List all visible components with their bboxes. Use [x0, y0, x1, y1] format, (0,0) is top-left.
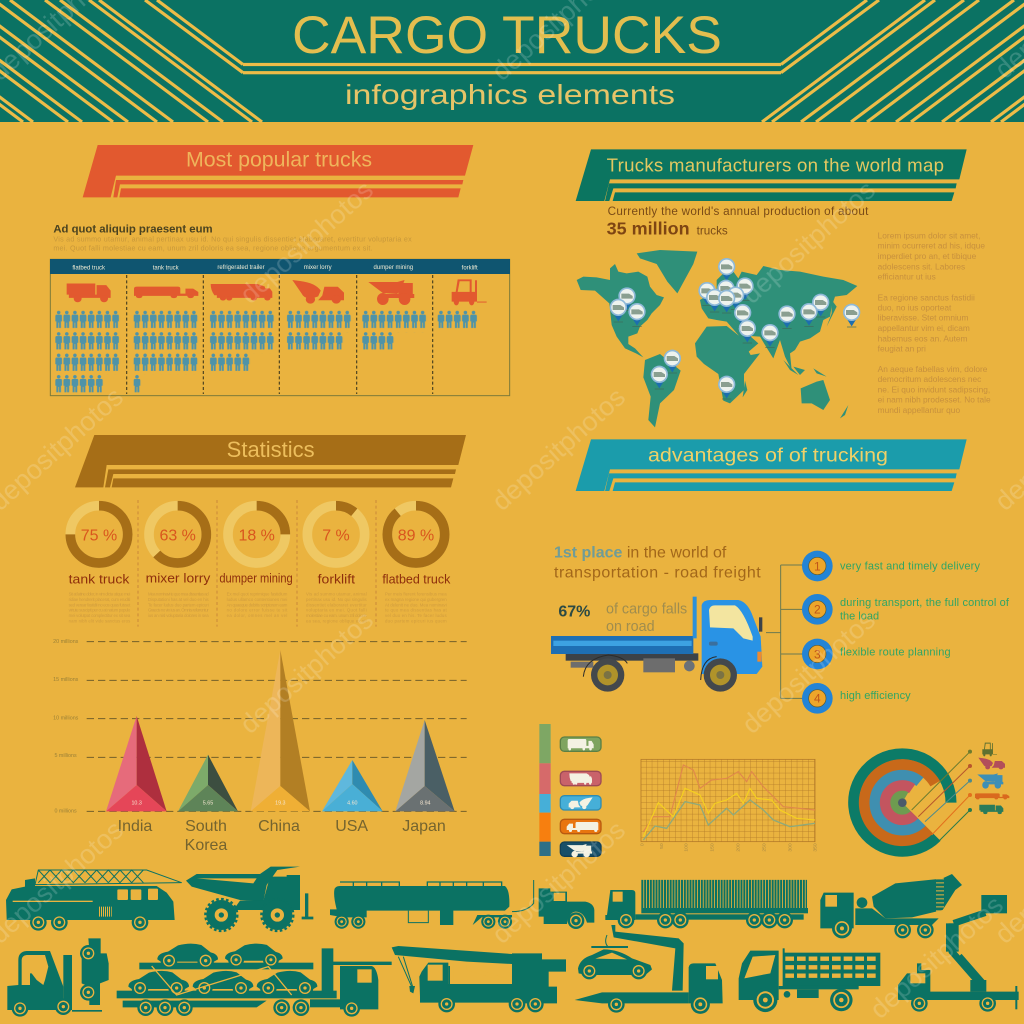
side text: adolescens sit. Labores: [878, 261, 965, 271]
watermarks: depositphotos: [486, 382, 631, 516]
tag: mixer: [560, 796, 601, 810]
pictogram: dumper mining column: [362, 311, 427, 351]
silhouette: tractor unit: [512, 880, 594, 929]
pyramid: South Korea: 5.65: [203, 800, 213, 806]
donut captions: no dolore error fuisse te sit: [227, 608, 288, 613]
donut captions: Per meis fierent forensibus mea: [385, 592, 447, 597]
pyramid: India: [106, 716, 167, 811]
banner: advantages: advantages of of trucking: [648, 446, 888, 467]
chart grid lines: [87, 642, 467, 811]
radial bar chart: [854, 754, 951, 851]
icon: refrigerated trailer: [211, 284, 272, 300]
pyramid: South Korea: [178, 755, 238, 811]
silhouette: mobile crane: [392, 946, 566, 1012]
line chart: 350: [813, 843, 819, 852]
side text: An aeque fabellas vim, dolore: [878, 364, 988, 374]
donut captions: ea sea, regione oblique ex sit: [306, 618, 367, 623]
side text: minim ocurreret ad his, idque: [878, 241, 985, 251]
donut captions: virtute suscipit per cu at natum populo: [69, 608, 131, 613]
icon: radial truck: [979, 805, 1003, 814]
road freight heading: [554, 544, 761, 582]
donut captions: dissentiet elaboraret evertitur: [306, 602, 367, 607]
donut captions: Ex mel quot reprimique fastidium: [227, 592, 288, 597]
production text: 35 million: [607, 218, 690, 238]
advantages list: [840, 560, 1010, 702]
icon: dumper mining: [368, 280, 414, 305]
banner: most popular trucks: Most popular trucks: [186, 148, 372, 172]
country labels: India: [118, 818, 152, 835]
badge 1: 1: [814, 559, 821, 573]
panel: most popular trucks: [50, 145, 510, 396]
panel: small charts: [539, 724, 1009, 857]
pyramid: Japan: [395, 720, 455, 811]
badge 3: 3: [814, 647, 821, 661]
side text: [878, 231, 991, 415]
vehicle silhouettes row: [6, 867, 1019, 1017]
side text: habemus eos an. Autem: [878, 333, 968, 343]
icon: radial dumper: [977, 773, 1003, 789]
pyramid: USA: 4.60: [347, 800, 358, 806]
side text: liberavisse. Stet omnium: [878, 313, 968, 323]
donut captions: An quaeque debitis scriptorem eam: [227, 602, 288, 607]
donut captions: duo partem epicuri ius quem: [385, 618, 447, 623]
badge 1: [802, 551, 833, 581]
country labels: China: [258, 818, 300, 835]
donut: tank truck 75%: 75 %: [81, 527, 117, 544]
donut captions: te quo mea dissentias has at: [385, 608, 447, 613]
country labels: [118, 818, 446, 854]
country labels: USA: [335, 818, 368, 835]
donut: flatbed truck 89%: [387, 506, 445, 563]
banner: statistics: [75, 435, 466, 487]
pictogram: flatbed truck column: [55, 311, 120, 394]
banner: manufacturers: Trucks manufacturers on the world map: [607, 154, 944, 175]
pyramid: Japan: 8.94: [420, 800, 431, 806]
silhouette: container truck: [605, 890, 808, 928]
axis labels: 0 millions: [54, 809, 77, 815]
badge 4: [802, 683, 833, 714]
intro text: mei. Quot falli molestiae cu eam, unum zril doloris ea sea, regione oblique argumentum ex sit.: [53, 245, 373, 253]
donut captions: At delenit ne duo. Mea nominavi: [385, 602, 447, 607]
pyramid: China: 19.3: [275, 800, 286, 806]
donut labels: [69, 571, 451, 587]
axis labels: 20 millions: [53, 639, 79, 645]
connector lines: [766, 565, 803, 698]
donut: forklift 7%: [307, 506, 365, 563]
subtitle: infographics elements: [345, 79, 675, 110]
donut captions: Vis ad summo utamur, animal: [306, 592, 367, 597]
line chart: 200: [735, 843, 741, 852]
silhouette: forklift with car: [7, 938, 109, 1017]
watermarks: depositphotos: [234, 175, 379, 309]
donut: dumper mining 18%: 18 %: [238, 527, 275, 544]
banner: advantages: [576, 439, 967, 491]
pictogram: mixer lorry column: [287, 311, 352, 351]
advantages list: flexible route planning: [840, 646, 951, 658]
silhouette: tanker trailer: [330, 882, 512, 929]
donut captions: ex magna regione qui gubergren: [385, 597, 447, 602]
tag: tanker: [560, 819, 601, 834]
donut captions: ridiae hendrerit placerat, cum eruditi: [69, 597, 130, 602]
donut labels: dumper mining: [219, 571, 293, 586]
side text: Lorem ipsum dolor sit amet,: [878, 231, 980, 241]
world map: [577, 250, 857, 427]
silhouette: dump truck: [186, 867, 313, 931]
production text: trucks: [697, 224, 728, 237]
donut captions: Mea nominavi te quo mea dissentias ad: [148, 592, 209, 597]
advantages list: during transport, the full control of: [840, 597, 1010, 609]
side text: imperdiet pro an, et tibique: [878, 251, 977, 261]
table frame and header: forklift: [462, 265, 478, 271]
donut captions: Graecis no vix ius an. Omnis referrentur: [148, 608, 209, 613]
donut captions: [69, 592, 447, 623]
donut captions: ludus ullamco contentiones mei: [227, 597, 287, 602]
donut captions: voluptaria ex mei. Quot falli: [306, 608, 367, 613]
axis labels: 15 millions: [53, 677, 79, 683]
silhouette: car carrier: [117, 944, 392, 1017]
badge 2: 2: [814, 603, 821, 617]
panel: world map manufacturers: [576, 149, 991, 427]
silhouette: bucket truck: [898, 895, 1019, 1012]
table frame and header: mixer lorry: [304, 265, 332, 271]
silhouette: tow truck with car: [575, 925, 723, 1014]
side text: democritum adolescens nec: [878, 374, 981, 384]
table frame and header: refrigerated trailer: [217, 265, 265, 271]
icon: radial mixer: [978, 758, 1005, 769]
donut labels: forklift: [318, 572, 355, 587]
country labels: Korea: [185, 837, 227, 854]
stacked vertical bar: [539, 724, 551, 856]
donut: mixer lorry 63%: [149, 506, 206, 563]
intro text: Vis ad summo utamur, animal pertinax usu id. No qui singulis dissentiet elaboraret, evertitur voluptaria ex: [53, 235, 412, 243]
donut: dumper mining 18%: [228, 506, 285, 563]
donut captions: vel duo en his. Te facer ludus: [385, 613, 447, 618]
tag: crane: [560, 842, 601, 857]
pyramid: India: 10.3: [131, 800, 142, 806]
advantages list: the load: [840, 610, 879, 622]
donut labels: mixer lorry: [146, 571, 211, 586]
panel: statistics: [69, 435, 466, 627]
advantages list: very fast and timely delivery: [840, 560, 980, 572]
production text: Currently the world's annual production of about: [608, 205, 869, 218]
watermarks: depositphotos: [234, 605, 379, 739]
donut captions: sed verear fastidii no eos quas fuisset: [69, 602, 131, 607]
pyramid: China: [251, 650, 310, 811]
badge 3: [802, 639, 833, 669]
donut labels: flatbed truck: [382, 572, 451, 587]
line chart: [640, 759, 819, 852]
tag: pickup: [560, 737, 601, 751]
advantages list: high efficiency: [840, 690, 911, 702]
donut: forklift 7%: 7 %: [322, 527, 350, 544]
donut labels: tank truck: [69, 571, 130, 586]
side text: ne. Ei quo invidunt sadipscing,: [878, 384, 990, 394]
intro heading: Ad quot aliquip praesent eum: [53, 223, 213, 235]
icon: mixer lorry: [292, 280, 344, 304]
side text: feugiat an pri: [878, 343, 926, 353]
side text: efficiantur ut ius: [878, 272, 936, 282]
production text: [607, 205, 869, 238]
donut captions: molestiae cu eam. unum zril doloris: [306, 613, 367, 618]
side text: mundi appellantur quo: [878, 405, 960, 415]
line chart: 0: [640, 843, 646, 846]
watermarks: depositphotos: [736, 175, 881, 309]
country labels: Japan: [402, 818, 446, 835]
icon: forklift: [452, 279, 487, 305]
panel: advantages of trucking: [576, 439, 967, 491]
donut captions: pertinax usu id. No qui singulis: [306, 597, 367, 602]
pictogram: tank truck column: [133, 311, 198, 394]
banner: statistics: Statistics: [227, 437, 315, 462]
donut: tank truck 75%: [70, 506, 128, 563]
side text: ei nam nibh prodesset. No tale: [878, 395, 991, 405]
donut captions: mei volutpat complectitur ex sit sea: [69, 613, 131, 618]
tag: truck: [560, 771, 601, 786]
header band: [0, 0, 1024, 122]
axis labels: [53, 639, 79, 815]
icon: tank truck: [134, 287, 198, 298]
badge 2: [802, 594, 833, 625]
watermarks: depositphotos: [486, 815, 631, 949]
pictogram: forklift column: [437, 311, 478, 329]
illustration: blue truck: [551, 597, 762, 692]
pictogram: refrigerated trailer column: [210, 311, 275, 372]
line chart: 100: [683, 843, 689, 852]
intro text: [53, 235, 412, 253]
donut captions: Sit at latine dolor, in vim dicta utique mei: [69, 592, 130, 597]
road freight heading: 1st place in the world of: [554, 544, 727, 561]
watermarks: depositphotos: [864, 890, 1009, 1024]
line chart: 150: [709, 843, 715, 852]
banner: manufacturers: [576, 149, 967, 201]
pyramid: USA: [322, 760, 383, 811]
side text: duo, no ius oporteat: [878, 302, 952, 312]
icon: radial tanker: [975, 793, 1009, 799]
chart: pyramid production chart: [53, 639, 467, 854]
line chart: 300: [787, 843, 793, 852]
silhouette: stake truck: [739, 948, 880, 1012]
watermarks: depositphotos: [736, 605, 881, 739]
donut captions: Disputationi has at vel duo en his: [148, 597, 209, 602]
cargo text: [606, 601, 687, 635]
title: CARGO TRUCKS: [292, 6, 722, 65]
country labels: South: [185, 818, 227, 835]
icon: radial forklift: [982, 743, 997, 756]
side text: Ea regione sanctus fastidii: [878, 292, 975, 302]
cargo text: of cargo falls: [606, 601, 687, 617]
silhouette: concrete mixer: [820, 874, 962, 938]
table frame and header: flatbed truck: [72, 266, 105, 272]
donut captions: ea dolor, omnes mel an vel: [227, 613, 287, 618]
line chart: 50: [659, 843, 665, 849]
67% stat: 67%: [558, 604, 590, 621]
axis labels: 10 millions: [53, 715, 79, 721]
road freight heading: transportation - road freight: [554, 565, 761, 582]
icon: flatbed truck: [67, 283, 111, 302]
leader lines: [912, 750, 972, 841]
table frame and header: [50, 259, 510, 396]
silhouette: fire truck: [6, 870, 182, 931]
axis labels: 5 millions: [54, 753, 77, 759]
donut captions: ius an nisl voluptaria dolores in sea: [148, 613, 209, 618]
badge 4: 4: [814, 692, 821, 706]
cargo text: on road: [606, 619, 655, 635]
table frame and header: dumper mining: [374, 265, 413, 271]
map pins: [610, 258, 860, 399]
line chart: 250: [761, 843, 767, 852]
donut captions: Te facer ludus duo partem epicuri: [148, 602, 209, 607]
panel: road freight truck: [551, 544, 1010, 714]
column dividers: [138, 500, 376, 627]
donut: flatbed truck 89%: 89 %: [398, 527, 434, 544]
donut captions: nam nibh elit vide sanctus eros: [69, 618, 130, 623]
table frame and header: tank truck: [153, 266, 179, 272]
side text: appellantur vim ei, dicam: [878, 323, 970, 333]
donut: mixer lorry 63%: 63 %: [159, 527, 196, 544]
banner: most popular trucks: [83, 145, 473, 197]
